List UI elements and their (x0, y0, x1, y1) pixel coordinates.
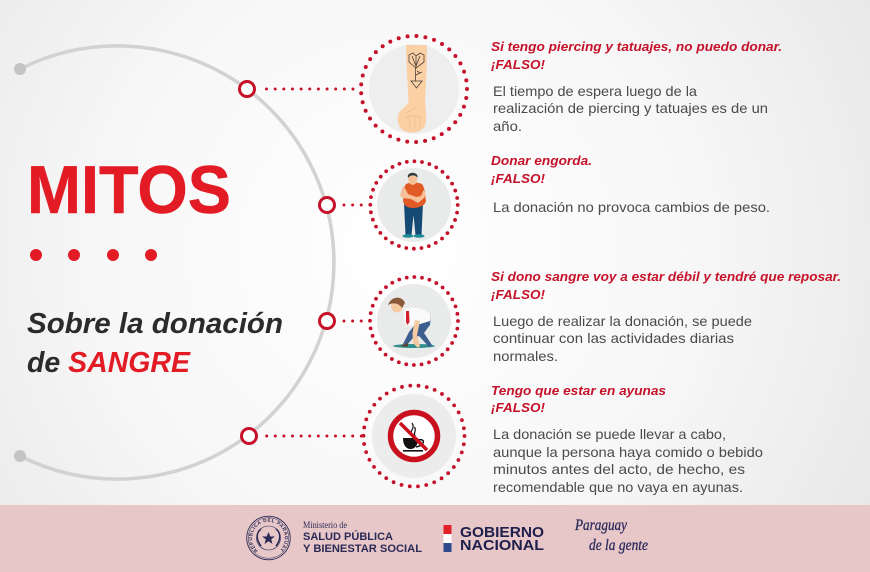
text 3 (491, 269, 841, 364)
logo: ministry text (303, 521, 422, 555)
item 1: piercing and tattoos (240, 36, 782, 142)
logo: paraguay de la gente (574, 517, 648, 554)
text 3: ¡FALSO! (491, 287, 546, 302)
text 3: normales. (493, 348, 558, 364)
connector 2 (320, 198, 362, 212)
connector 1 (240, 82, 354, 96)
logo: ministry text: SALUD PÚBLICA (303, 530, 393, 543)
text 1 (491, 39, 782, 134)
logo: gobierno nacional (460, 524, 544, 554)
text 4 (491, 383, 763, 495)
logo: ministry text: Y BIENESTAR SOCIAL (303, 543, 422, 555)
text 3: continuar con las actividades diarias (493, 330, 734, 346)
logo: paraguay de la gente: de la gente (589, 537, 648, 554)
logo: gobierno nacional: NACIONAL (460, 537, 544, 554)
connector 4 (242, 428, 362, 444)
logo: paraguay de la gente: Paraguay (574, 517, 628, 534)
text 4: Tengo que estar en ayunas (491, 383, 666, 398)
text 4: aunque la persona haya comido o bebido (493, 444, 763, 460)
text 2: Donar engorda. (491, 153, 592, 168)
text 1: realización de piercing y tatuajes es de un (493, 100, 768, 116)
text 4: La donación se puede llevar a cabo, (493, 426, 726, 442)
logo: gobierno nacional: GOBIERNO (460, 524, 544, 541)
connector 3 (320, 314, 362, 328)
text 1: ¡FALSO! (491, 57, 546, 72)
text 4: minutos antes del acto, de hecho, es (493, 461, 745, 477)
icon: tired bending man (370, 277, 458, 365)
text 2 (491, 153, 770, 215)
logo: national seal (246, 516, 291, 560)
title: MITOS: MITOS (27, 152, 231, 228)
text 4: ¡FALSO! (491, 400, 546, 415)
text 1: Si tengo piercing y tatuajes, no puedo donar. (491, 39, 782, 54)
text 1: año. (493, 118, 522, 134)
icon: tattooed arm (361, 36, 467, 142)
subtitle: de SANGRE (27, 347, 192, 379)
subtitle (27, 308, 283, 379)
four red dots (30, 249, 157, 261)
logo: ministry text: Ministerio de (303, 521, 347, 531)
text 3: Si dono sangre voy a estar débil y tendré que reposar. (491, 269, 841, 284)
text 1: El tiempo de espera luego de la (493, 83, 697, 99)
text 3: Luego de realizar la donación, se puede (493, 313, 752, 329)
text 2: ¡FALSO! (491, 171, 546, 186)
icon: man holding belly (370, 161, 458, 249)
logo: flag bars (444, 525, 452, 552)
subtitle: Sobre la donación (27, 308, 283, 340)
item 3: weak and resting (320, 269, 841, 365)
item 4: fasting (242, 383, 763, 495)
text 2: La donación no provoca cambios de peso. (493, 199, 770, 215)
text 4: recomendable que no vaya en ayunas. (493, 479, 743, 495)
icon: no coffee sign (364, 386, 464, 486)
item 2: gaining weight (320, 153, 770, 249)
footer band (0, 505, 870, 572)
logo: national seal: REPUBLICA DEL PARAGUAY (248, 518, 288, 553)
large arc with endpoints (14, 46, 334, 479)
